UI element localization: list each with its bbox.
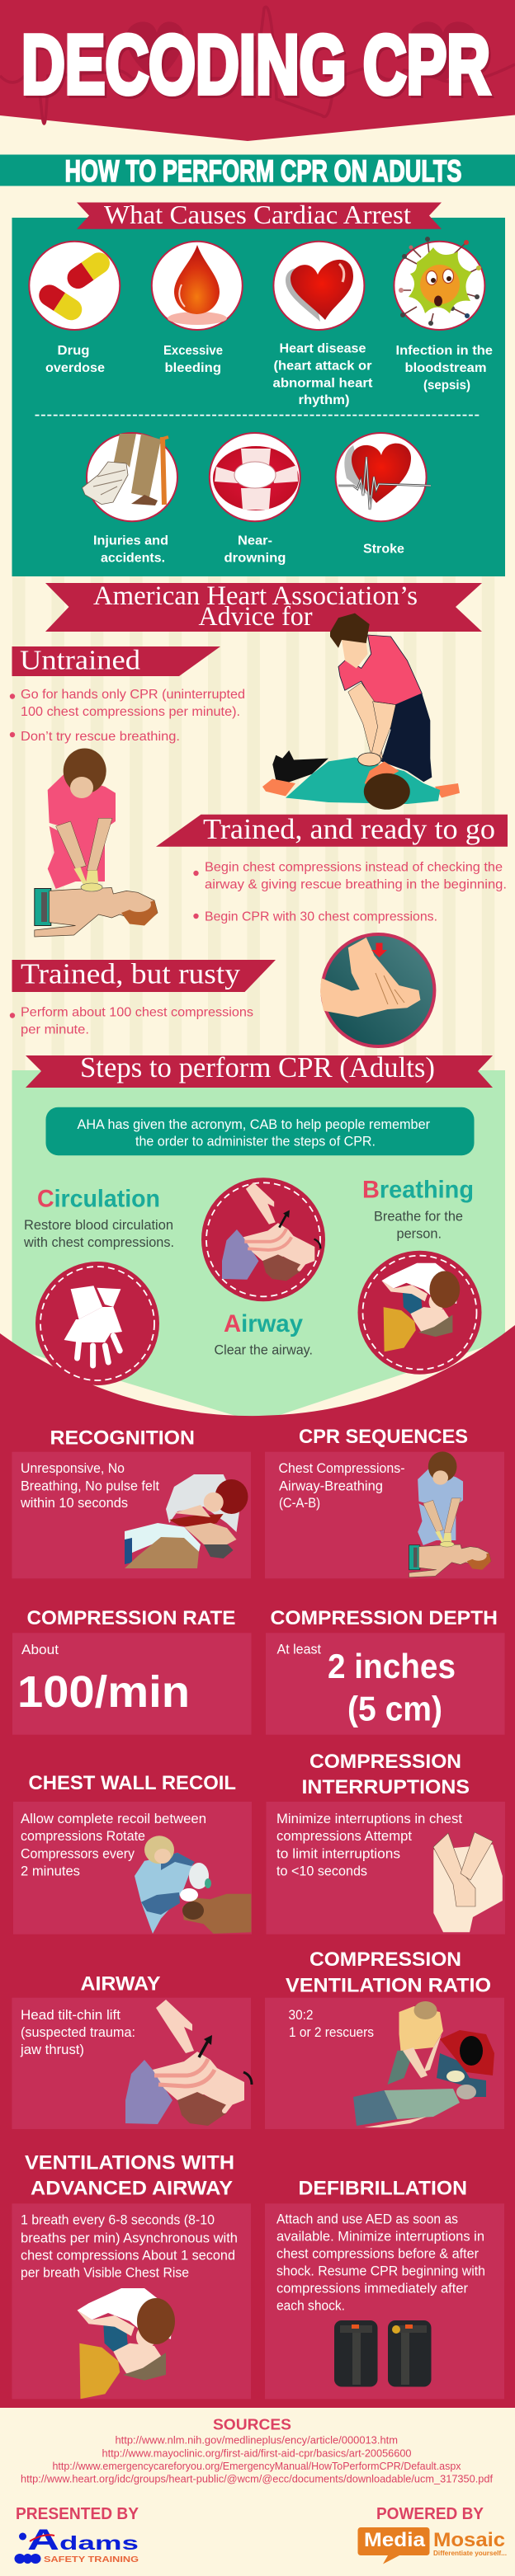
card: CPR sequences: Airway-Breathing (279, 1478, 383, 1493)
card: compression interruptions: Minimize interruptions in chest (276, 1812, 462, 1826)
card: recognition: Unresponsive, No (21, 1461, 125, 1476)
heading: Presented by: PRESENTED BY (16, 2505, 139, 2523)
illustration: woman giving compressions (35, 749, 158, 937)
ribbon: Steps to perform CPR (26, 1051, 493, 1088)
heading: CPR Sequences: CPR SEQUENCES (299, 1426, 468, 1448)
icon: blood drop (152, 242, 243, 330)
card: compression depth: At least (277, 1643, 321, 1657)
step: breathing text: Breathe for the (374, 1209, 463, 1225)
callout: CAB acronym: AHA has given the acronym, CAB to help people remember (78, 1117, 430, 1132)
label: Injuries and accidents (93, 534, 168, 566)
crimson guidelines background (0, 1325, 515, 2408)
card: recognition: within 10 seconds (20, 1496, 128, 1511)
step: airway text: Clear the airway. (215, 1342, 313, 1358)
icon: airway circle (201, 1178, 325, 1301)
step: airway text (215, 1310, 313, 1358)
icon: defibrillator paddles (334, 2320, 431, 2386)
card: compression rate: About (21, 1643, 59, 1657)
card: compression interruptions: compressions Attempt (276, 1829, 412, 1844)
text: trained advice (193, 861, 507, 924)
card: defibrillation: available. Minimize interruptions in (276, 2229, 484, 2244)
step: circulation text: Circulation (37, 1185, 160, 1212)
sources: SOURCES (213, 2416, 291, 2433)
label: Excessive bleeding: bleeding (165, 361, 221, 375)
step: circulation text (23, 1185, 174, 1250)
card: CPR sequences: (C-A-B) (279, 1496, 320, 1511)
illustration: man giving compressions (262, 613, 460, 810)
label: Heart disease (272, 342, 373, 407)
sources (21, 2416, 493, 2485)
label: Infection in the bloodstream: Infection in the (396, 344, 493, 358)
logo: Adams Safety Training: SAFETY TRAINING (44, 2555, 139, 2564)
heading: Compression Interruptions: COMPRESSION (309, 1751, 461, 1773)
text: rusty advice: Perform about 100 chest compressions (21, 1006, 253, 1020)
text: untrained advice (10, 688, 245, 744)
card: defibrillation: compressions immediately after (276, 2281, 469, 2296)
text: untrained advice: Go for hands only CPR (uninterrupted (21, 688, 245, 702)
card: defibrillation: each shock. (276, 2298, 345, 2313)
sources: http://www.heart.org/idc/groups/heart-public/@wcm/@ecc/documents/downloadable/ucm_317350.pdf (21, 2473, 493, 2485)
card: compression ventilation ratio: 30:2 (289, 2008, 314, 2023)
step: breathing text: Breathing (362, 1176, 474, 1203)
card: compression depth: 2 inches (328, 1647, 456, 1685)
heading: Compression Ventilation Ratio (286, 1948, 491, 1997)
card: defibrillation (265, 2203, 504, 2399)
card: airway (12, 1998, 252, 2129)
heading: Compression Depth: COMPRESSION DEPTH (271, 1607, 498, 1629)
illustration: checking breathing (125, 1474, 248, 1568)
card: ventilations with advanced airway: 1 breath every 6-8 seconds (8-10 (21, 2213, 215, 2228)
ribbon: Untrained: Untrained (20, 646, 140, 676)
icon: pills (29, 242, 120, 330)
logo: Media Mosaic: Differentiate yourself... (433, 2549, 507, 2557)
card: defibrillation: Attach and use AED as soon as (276, 2212, 458, 2227)
label: Near-drowning (224, 534, 286, 566)
icon: injured leg with crutch (83, 433, 177, 521)
card: compression rate (12, 1633, 251, 1735)
card: ventilations with advanced airway: breaths per min) Asynchronous with (21, 2230, 238, 2245)
icon: heart (273, 242, 364, 330)
ribbon: Trained, and ready to go: Trained, and ready to go (203, 813, 495, 845)
card: compression ventilation ratio (265, 1998, 504, 2129)
ribbon: Trained, but rusty: Trained, but rusty (21, 958, 241, 990)
icon: heart with ECG line (336, 433, 431, 521)
sources: http://www.emergencycareforyou.org/EmergencyManual/HowToPerformCPR/Default.aspx (53, 2460, 461, 2472)
label: Near-drowning: Near- (238, 534, 272, 548)
step: circulation text: Restore blood circulation (24, 1217, 173, 1233)
label: Excessive bleeding: Excessive (163, 344, 223, 358)
label: Infection in the bloodstream: bloodstream (404, 361, 487, 375)
label: Stroke: Stroke (363, 543, 404, 556)
ribbon: What Causes Cardiac Arrest: What Causes Cardiac Arrest (104, 200, 411, 229)
card: ventilations with advanced airway: chest compressions About 1 second (21, 2249, 235, 2263)
step: circulation text: with chest compressions. (23, 1234, 174, 1250)
card: ventilations with advanced airway (12, 2203, 251, 2399)
label: Near-drowning: drowning (224, 552, 286, 566)
ribbon: Steps to perform CPR: Steps to perform CPR (Adults) (80, 1051, 435, 1084)
heading: Compression Rate: COMPRESSION RATE (26, 1607, 236, 1629)
heading: Ventilations with Advanced Airway: VENTILATIONS WITH (25, 2152, 234, 2174)
label: Infection in the bloodstream: (sepsis) (423, 378, 470, 393)
illustration: head tilt chin lift (125, 2000, 252, 2126)
text: rusty advice (10, 1006, 253, 1037)
label: Injuries and accidents: Injuries and (93, 534, 168, 548)
card: airway: (suspected trauma: (21, 2025, 135, 2040)
text: rusty advice: per minute. (21, 1022, 89, 1037)
logo: Media Mosaic: Media (364, 2529, 426, 2551)
heading: Powered by: POWERED BY (376, 2505, 484, 2523)
icon: life buoy (210, 433, 300, 521)
header banner (0, 0, 515, 141)
label: Drug overdose: Drug (58, 344, 89, 358)
text: trained advice: Begin CPR with 30 chest compressions. (205, 910, 437, 924)
label: Injuries and accidents: accidents. (101, 552, 165, 566)
logo: Adams Safety Training (15, 2524, 139, 2564)
label: Heart disease: (heart attack or (274, 360, 371, 374)
step: airway text: Airway (224, 1310, 303, 1337)
heading: Compression Interruptions: INTERRUPTIONS (302, 1776, 470, 1798)
icon: circulation hands (35, 1262, 159, 1385)
card: recognition (12, 1452, 251, 1578)
label: Heart disease: abnormal heart (272, 377, 373, 391)
step: breathing text (362, 1176, 474, 1242)
card: compression ventilation ratio: 1 or 2 rescuers (289, 2025, 374, 2040)
text: trained advice: Begin chest compressions instead of checking the (205, 861, 503, 875)
heading: Compression Interruptions (302, 1751, 470, 1798)
callout: CAB acronym (46, 1107, 474, 1155)
ribbon: Untrained (12, 646, 220, 676)
card: chest wall recoil: compressions Rotate (21, 1829, 145, 1844)
illustration: two rescuers (353, 2001, 494, 2127)
card: CPR sequences (265, 1451, 504, 1578)
card: airway: Head tilt-chin lift (21, 2008, 120, 2023)
heading: Defibrillation: DEFIBRILLATION (299, 2178, 467, 2200)
label: Excessive bleeding (163, 344, 223, 375)
sources: http://www.nlm.nih.gov/medlineplus/ency/article/000013.htm (116, 2433, 398, 2446)
logo: Adams Safety Training: A (27, 2524, 59, 2556)
logo: Media Mosaic (358, 2527, 507, 2564)
icon: breathing circle (358, 1251, 482, 1375)
heading: Chest Wall Recoil: CHEST WALL RECOIL (28, 1772, 236, 1794)
card: compression depth: (5 cm) (347, 1690, 442, 1728)
card: CPR sequences: Chest Compressions- (279, 1461, 404, 1476)
callout: CAB acronym: the order to administer the steps of CPR. (135, 1135, 376, 1149)
illustration: nurse with mask (135, 1836, 251, 1934)
icon: hand position circle (320, 934, 434, 1046)
label: Drug overdose: overdose (45, 361, 105, 375)
card: compression interruptions (266, 1802, 505, 1934)
label: Heart disease: rhythm) (299, 393, 350, 407)
sources: http://www.mayoclinic.org/first-aid/first-aid-cpr/basics/art-20056600 (102, 2447, 411, 2459)
heading: Airway: AIRWAY (81, 1972, 160, 1995)
logo: Media Mosaic: Mosaic (433, 2529, 505, 2551)
illustration: hands on chest (433, 1832, 503, 1932)
heading: Compression Ventilation Ratio: COMPRESSION (309, 1948, 461, 1971)
panel: steps to perform CPR (12, 1051, 505, 1422)
card: compression rate: 100/min (17, 1667, 190, 1717)
text: untrained advice: Don’t try rescue breathing. (21, 730, 180, 744)
card: compression depth (266, 1633, 505, 1735)
card: chest wall recoil: Compressors every (21, 1846, 135, 1861)
card: chest wall recoil: 2 minutes (21, 1864, 80, 1878)
label: Drug overdose (45, 344, 105, 375)
label: Heart disease: Heart disease (279, 342, 366, 356)
ribbon: American Heart Association's Advice for: Advice for (198, 602, 313, 632)
card: airway: jaw thrust) (20, 2042, 84, 2057)
panel: causes of cardiac arrest (12, 200, 505, 576)
label: Infection in the bloodstream (396, 344, 493, 393)
logo: Adams Safety Training: dams (59, 2532, 139, 2554)
heading: Ventilations with Advanced Airway (25, 2152, 234, 2200)
text: untrained advice: 100 chest compressions per minute). (21, 705, 240, 719)
step: breathing text: person. (396, 1226, 442, 1242)
card: chest wall recoil (13, 1802, 252, 1934)
card: defibrillation: chest compressions before & after (276, 2246, 479, 2261)
card: ventilations with advanced airway: per breath Visible Chest Rise (21, 2265, 189, 2280)
card: recognition: Breathing, No pulse felt (21, 1478, 159, 1493)
text: trained advice: airway & giving rescue breathing in the beginning. (205, 878, 507, 892)
icon: bacteria (394, 237, 484, 330)
heading: Recognition: RECOGNITION (50, 1427, 195, 1450)
card: compression interruptions: to limit interruptions (276, 1846, 400, 1861)
card: defibrillation: shock. Resume CPR beginning with (276, 2263, 485, 2278)
card: compression interruptions: to <10 seconds (276, 1864, 367, 1878)
card: chest wall recoil: Allow complete recoil between (21, 1812, 206, 1826)
illustration: rescue breathing (78, 2288, 175, 2399)
ribbon: American Heart Association's Advice for: American Heart Association’s (93, 581, 418, 611)
illustration: nurse doing compressions (409, 1451, 491, 1577)
ribbon: American Heart Association's Advice for (45, 581, 482, 632)
heading: Ventilations with Advanced Airway: ADVANCED AIRWAY (31, 2178, 233, 2200)
heading: Compression Ventilation Ratio: VENTILATION RATIO (286, 1975, 491, 1997)
